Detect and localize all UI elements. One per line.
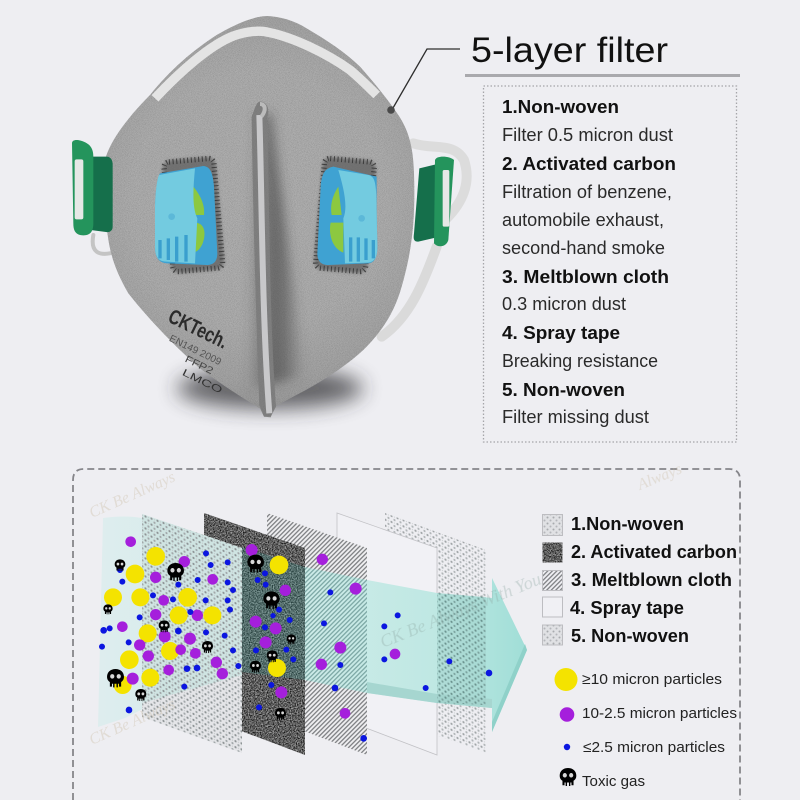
- blue particles: [99, 551, 296, 713]
- left valve: [155, 156, 225, 274]
- layer text list: 1.Non-woven: [502, 97, 619, 117]
- watermark signatures: CK Be Always: [87, 696, 178, 749]
- legend labels: layers: 3. Meltblown cloth: [571, 570, 732, 590]
- layer text list: 0.3 micron dust: [502, 294, 626, 314]
- layer text list: Filter missing dust: [502, 407, 649, 427]
- purple particles: [316, 554, 400, 719]
- layer 3 meltblown cloth: [267, 513, 367, 755]
- legend: particles: [554, 668, 737, 790]
- centre fold seam: [252, 102, 276, 417]
- swatch: non-woven: [542, 625, 562, 645]
- layer text list: 4. Spray tape: [502, 323, 620, 343]
- title: 5-layer filter: [471, 31, 668, 70]
- left green buckle: [72, 140, 113, 235]
- layer 5 non-woven: [385, 513, 486, 753]
- watermark signatures: [87, 461, 684, 749]
- watermark signatures: Always: [634, 461, 684, 494]
- mask body: [105, 16, 414, 417]
- swatch: activated carbon: [542, 542, 562, 562]
- legend labels: particles: [582, 671, 737, 790]
- legend labels: layers: [570, 514, 737, 646]
- arrow-tinted layer 5: [437, 593, 486, 705]
- legend labels: particles: ≥10 micron particles: [582, 671, 722, 688]
- layer text list: 3. Meltblown cloth: [502, 267, 669, 287]
- yellow particles: [104, 547, 288, 694]
- brand print: [147, 305, 247, 397]
- mask product photo: [72, 16, 467, 417]
- layer text list: 5. Non-woven: [502, 380, 625, 400]
- layer text list: Breaking resistance: [502, 351, 658, 371]
- panel: layer descriptions: [484, 86, 736, 442]
- mask shadow: [177, 368, 363, 409]
- layer text list: [502, 97, 676, 427]
- brand print: FFP2: [183, 354, 215, 377]
- watermark signatures: CK Be Always With You: [377, 569, 544, 652]
- legend labels: layers: 4. Spray tape: [570, 598, 684, 618]
- nose wire edge: [155, 31, 377, 98]
- brand print: LMCO: [180, 368, 224, 397]
- layer text list: 2. Activated carbon: [502, 154, 676, 174]
- leader line: [387, 49, 460, 114]
- particles: right group: [316, 554, 492, 741]
- arrow-tinted layer 3 hatch: [305, 567, 367, 693]
- legend labels: particles: ≤2.5 micron particles: [583, 739, 725, 756]
- legend labels: layers: 1.Non-woven: [571, 514, 684, 534]
- legend: skull: [560, 768, 576, 786]
- particles: left group: [99, 536, 296, 720]
- swatch: non-woven: [542, 514, 562, 536]
- layer text list: second-hand smoke: [502, 238, 665, 258]
- layer text list: Filter 0.5 micron dust: [502, 125, 673, 145]
- legend labels: layers: 5. Non-woven: [571, 626, 689, 646]
- legend labels: layers: 2. Activated carbon: [571, 542, 737, 562]
- right green buckle: [414, 157, 454, 246]
- legend labels: particles: Toxic gas: [582, 773, 645, 790]
- layer text list: Filtration of benzene,: [502, 182, 672, 202]
- diagram: filter layers and particles: [98, 513, 527, 755]
- straps: [93, 143, 467, 337]
- purple particles: [117, 536, 291, 698]
- swatch: spray tape: [542, 597, 562, 617]
- panel: filtration diagram frame: [73, 469, 740, 800]
- layer 1 non-woven: [142, 514, 242, 753]
- toxic gas skulls: [103, 555, 296, 720]
- legend: blue particle: [564, 744, 570, 750]
- layer 2 activated carbon: [204, 513, 305, 755]
- blue particles: [321, 590, 492, 741]
- legend: layers: [542, 514, 737, 646]
- layer text list: automobile exhaust,: [502, 210, 664, 230]
- legend: yellow particle: [554, 668, 578, 691]
- layer 4 spray tape: [337, 513, 437, 755]
- swatch: meltblown cloth: [542, 570, 562, 590]
- legend labels: particles: 10-2.5 micron particles: [582, 705, 737, 722]
- brand print: CKTech.: [165, 305, 232, 353]
- dark shading around centre fold: [247, 113, 305, 390]
- watermark signatures: CK Be Always: [87, 469, 178, 522]
- brand print: EN149 2009: [167, 333, 223, 368]
- legend: purple particle: [560, 707, 574, 722]
- airflow arrow: [98, 516, 527, 732]
- right valve: [313, 156, 377, 274]
